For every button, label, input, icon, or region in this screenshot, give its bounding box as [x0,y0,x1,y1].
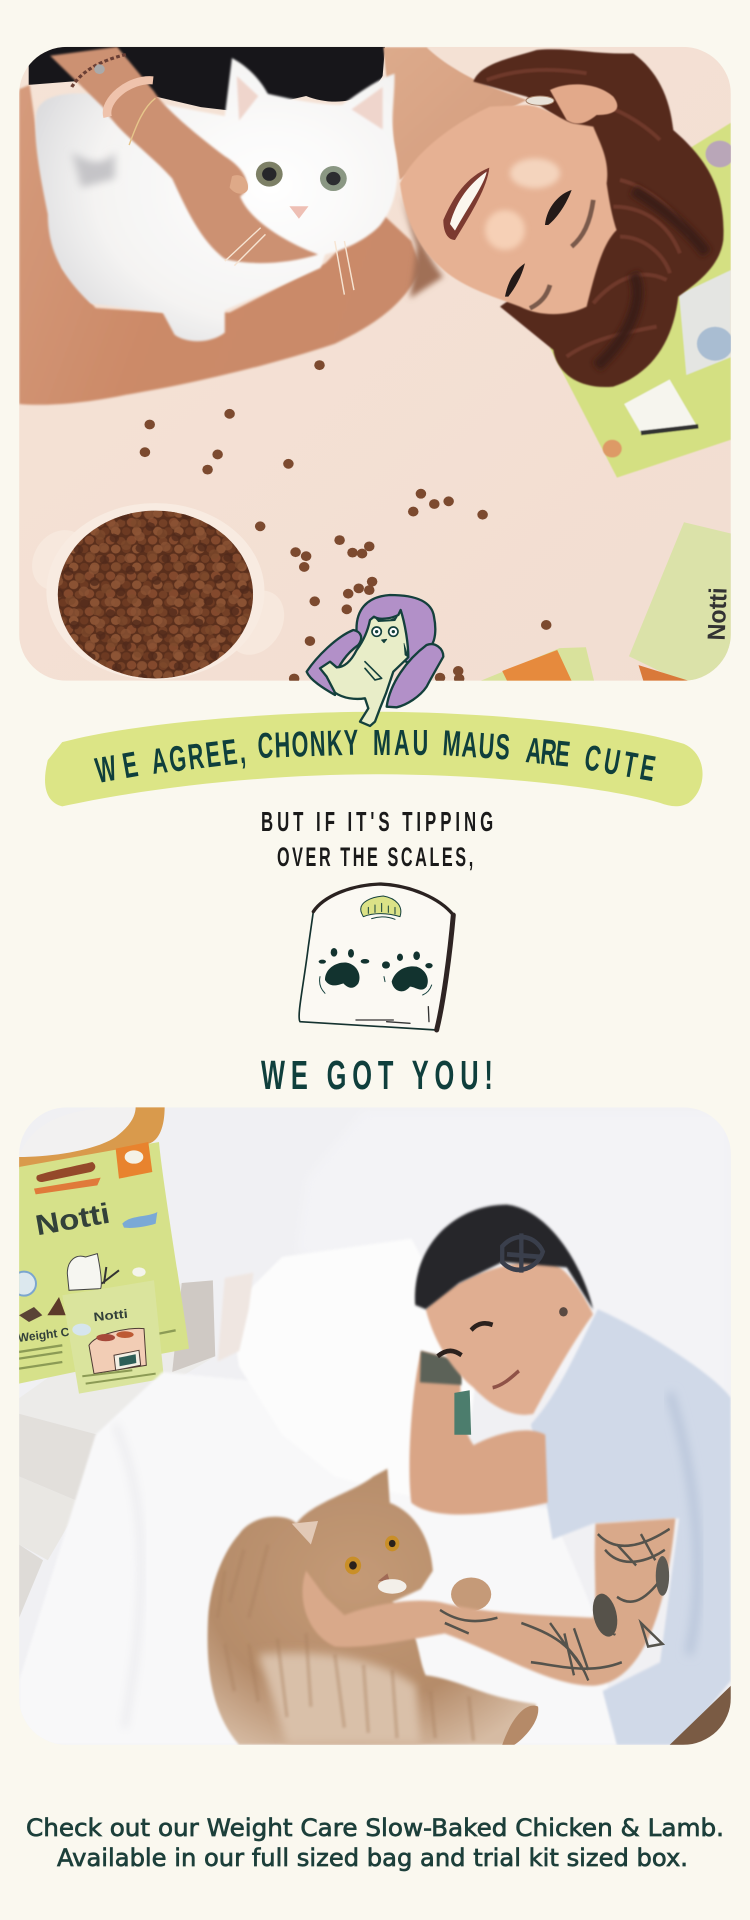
bracelets [107,80,153,117]
cat face [292,1521,407,1594]
ginger cat [208,1469,536,1745]
duvet [66,1370,184,1528]
booklet on floor [550,123,734,478]
footer text: Available in our full sized bag and trial kit sized box. [57,1844,688,1872]
head tattoo [502,1233,543,1273]
cat fur strokes [229,1648,476,1741]
food bag [12,1107,189,1384]
banner heading [93,723,658,791]
banner heading: AGREE, [149,731,248,782]
smile [443,168,489,240]
icon: bathroom scale with paw prints [299,884,453,1030]
black shirt [29,47,385,112]
text: but if it's tipping over the scales: OVER THE SCALES, [277,842,473,872]
cat ear shading [237,76,383,129]
forearm and hand [50,47,318,263]
scattered kibble [140,360,551,683]
bedside table [19,1280,215,1618]
footer text [26,1814,724,1872]
eyes and brows [545,190,572,225]
whiskers [225,228,354,295]
photo: person and ginger cat in bed with Notti packaging [12,1107,731,1745]
trial kit box [62,1280,164,1394]
banner: curved lime stroke [45,712,703,806]
dial [361,896,401,919]
food bag: Notti [33,1198,112,1242]
banner heading: WE [93,745,141,791]
banner heading: ARE [524,731,572,775]
photo: person and white cat on peach floor [19,47,734,683]
green product box: Notti [703,587,733,641]
orange product box [481,647,594,681]
cat eyes [256,162,347,219]
white cat [35,58,397,341]
person: head [426,1261,593,1415]
green product box [629,522,733,681]
cat tail paw [502,1706,538,1745]
paw prints [319,948,433,991]
back pillow [297,1110,731,1414]
lower arm [19,85,421,405]
Notti packaging [12,1107,189,1394]
banner heading: MAUS [441,724,511,768]
food bag: Weight Ca [17,1324,77,1345]
person: bent arm [409,1351,548,1514]
tattooed arm and hand [303,1518,675,1686]
banner heading: MAU [373,723,428,763]
banner heading: CUTE [582,738,658,790]
icon: cat in purple armchair [307,595,443,726]
person: shirt [531,1309,731,1745]
footer text: Check out our Weight Care Slow-Baked Chicken & Lamb. [26,1814,724,1842]
trial kit box: Notti [93,1307,128,1324]
portrait: neck, hair and smiling face [383,47,724,387]
food bowl [22,503,295,680]
banner heading: CHONKY [257,723,359,766]
text: but if it's tipping over the scales [261,806,493,872]
text: but if it's tipping over the scales: BUT IF IT'S TIPPING [261,806,493,837]
text: we got you: WE GOT YOU! [261,1053,493,1099]
front pillow [230,1239,478,1497]
face features [438,1323,493,1356]
